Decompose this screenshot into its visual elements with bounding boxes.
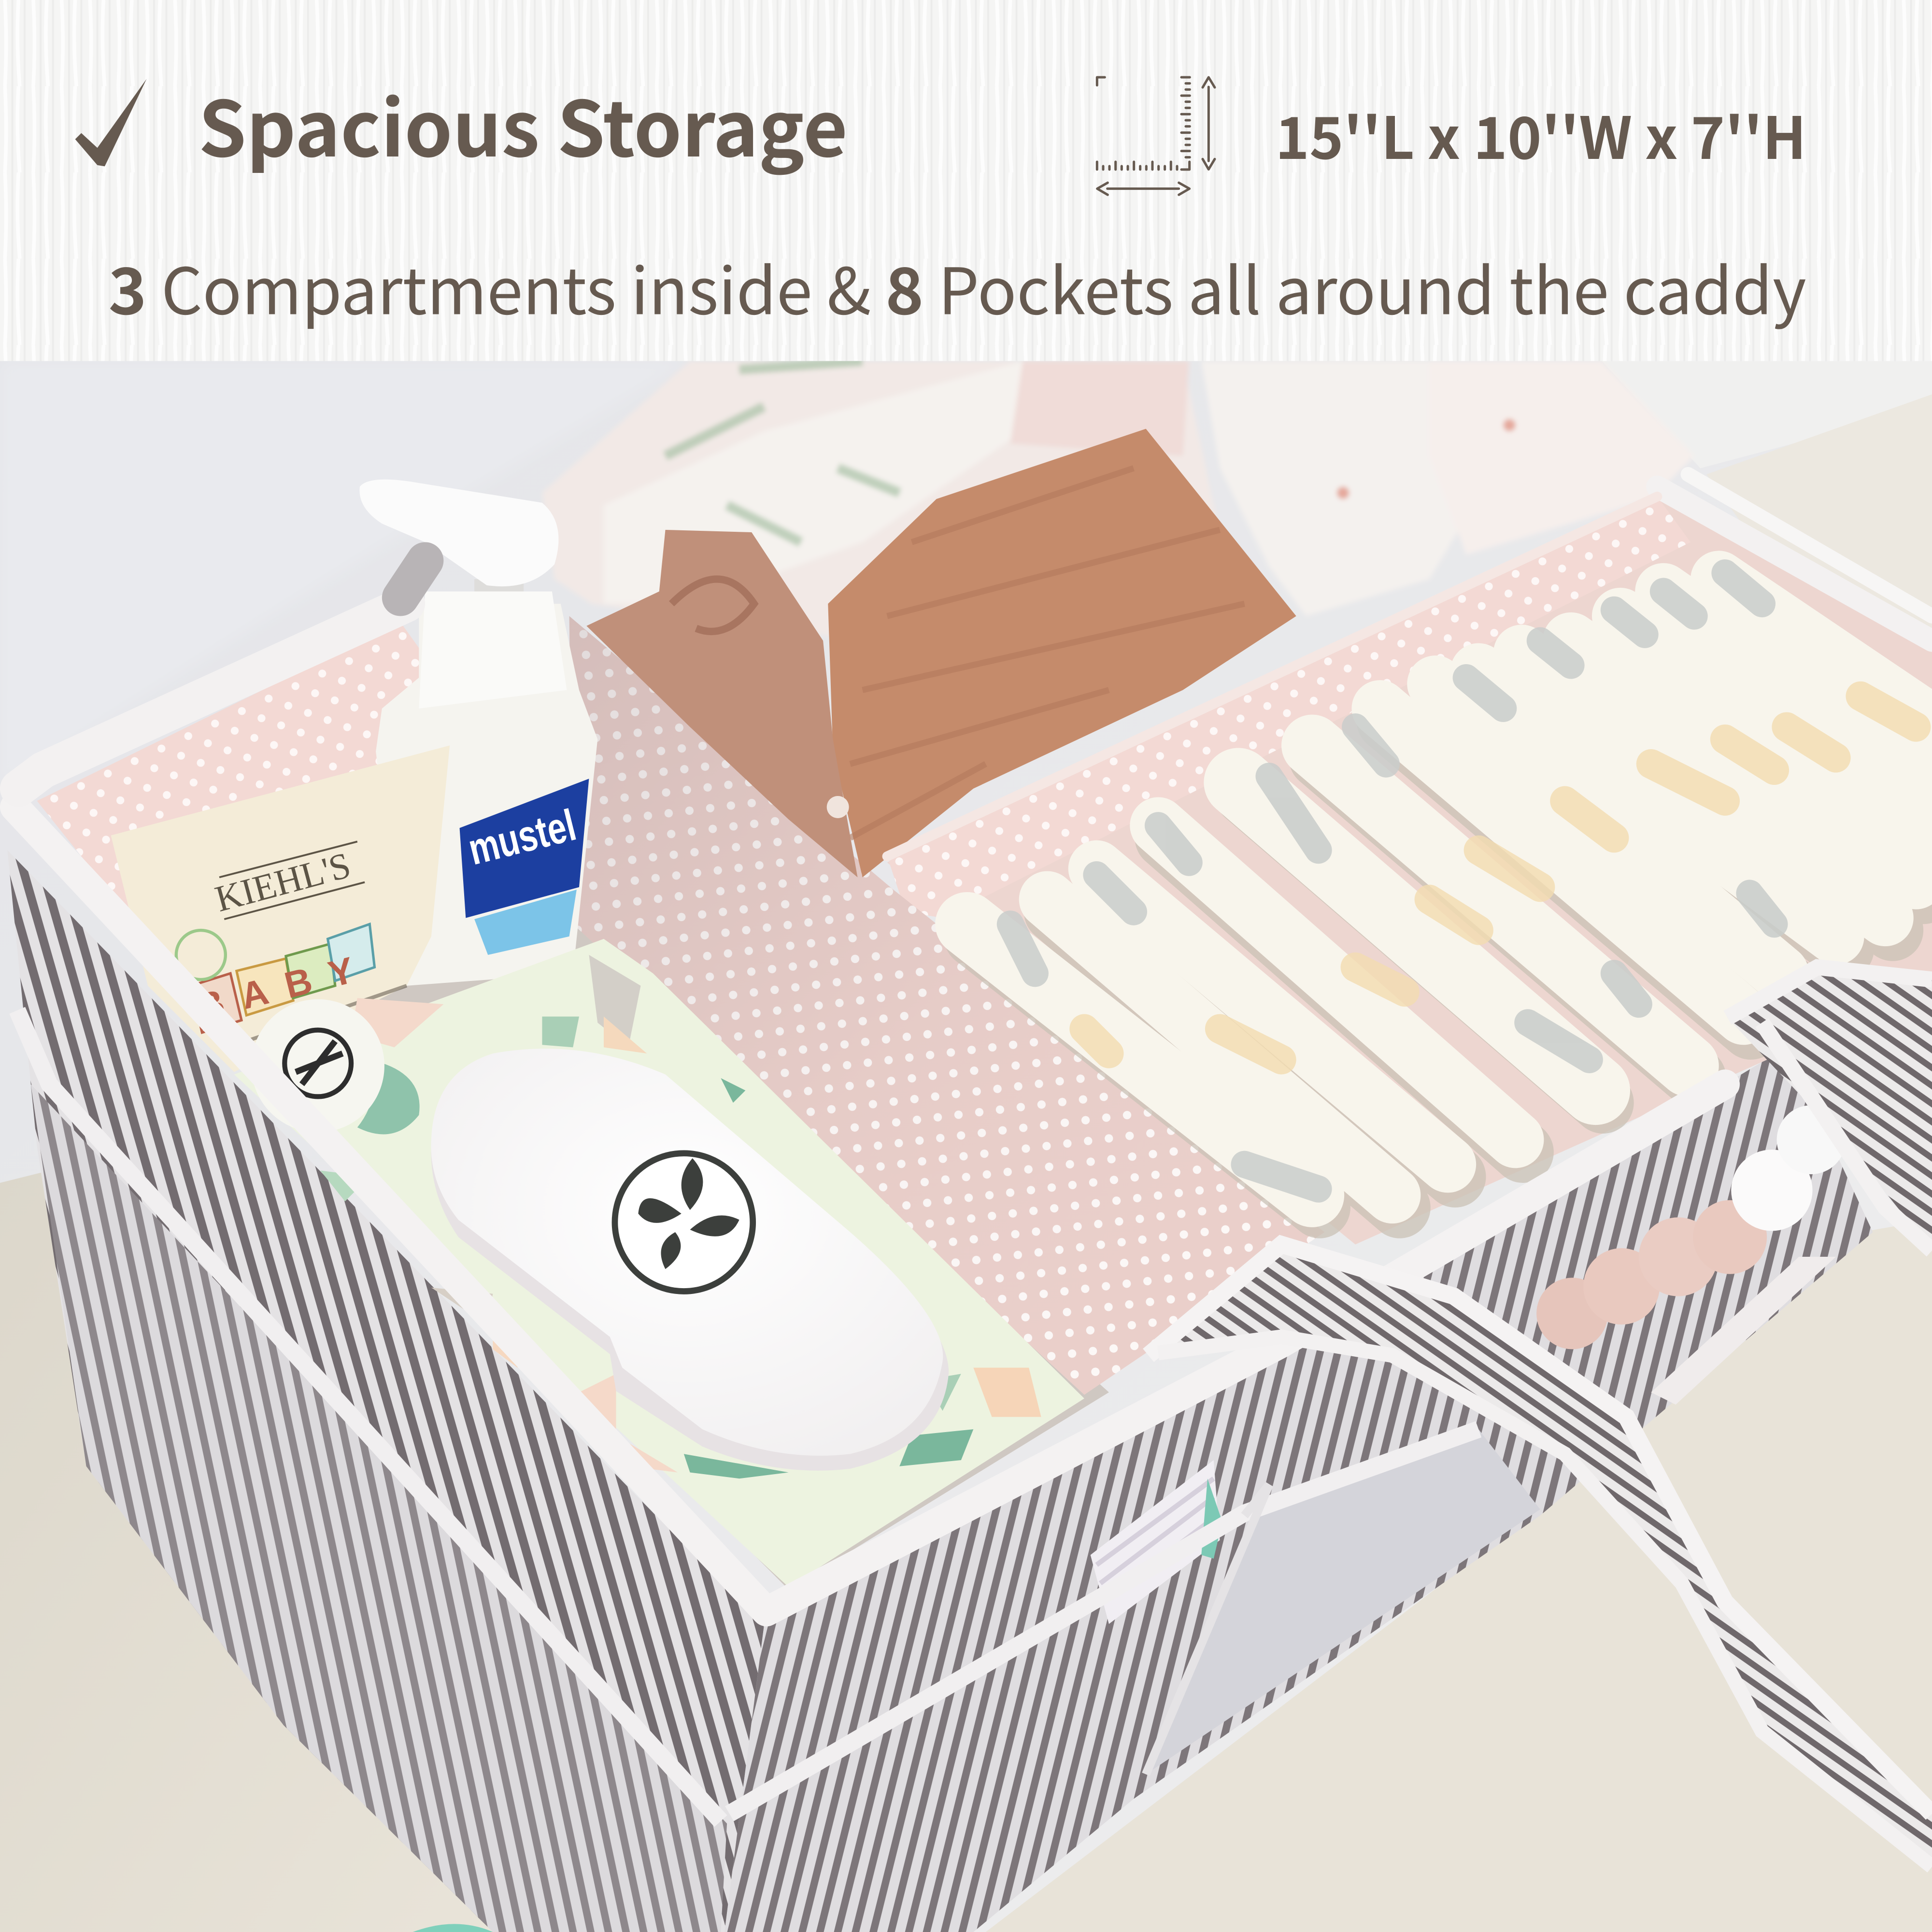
icon: ruler dimensions [1097, 77, 1215, 195]
white wipes lid [431, 1049, 949, 1471]
rolled onesie [586, 530, 858, 877]
right back handle [1728, 967, 1932, 1250]
teal corner of base [413, 1924, 493, 1932]
flush sticker [251, 999, 384, 1132]
Kiehl's tube [111, 745, 450, 1072]
heading: Spacious Storage: Spacious Storage [199, 68, 848, 179]
bundled blankets behind caddy [542, 361, 1694, 641]
long pink divider [887, 497, 1690, 918]
pocket trims [17, 1010, 1478, 1821]
interior floor under products [185, 912, 1109, 1590]
pump bottle [359, 480, 597, 986]
dimensions text: 15''L x 10''W x 7''H [1275, 92, 1806, 176]
mustela label [460, 779, 589, 955]
terracotta muslin cloth [828, 429, 1296, 877]
diapers [967, 573, 1932, 1208]
Kiehl's tube: KIEHL'S [211, 844, 355, 920]
Kiehl's tube: BABY [193, 950, 358, 1028]
subheading: compartments and pockets: 3 Compartments inside & 8 Pockets all around the caddy [108, 241, 1806, 333]
wipes package [234, 939, 1084, 1587]
header band [0, 0, 1932, 361]
right compartment back panel [887, 499, 1932, 1245]
central pink divider [569, 616, 1324, 1395]
icon: check mark [75, 79, 147, 166]
front wall with stripes [724, 1047, 1873, 1932]
silicone teether beads [1536, 1105, 1846, 1349]
toothbrush in side pocket [1091, 1460, 1222, 1624]
mustela label: mustel [464, 800, 581, 874]
interior left back wall [37, 622, 591, 986]
brand logo [615, 1153, 753, 1291]
left side wall with stripes [7, 850, 764, 1932]
front handle [1149, 1245, 1932, 1867]
caddy white rim [15, 474, 1932, 1612]
